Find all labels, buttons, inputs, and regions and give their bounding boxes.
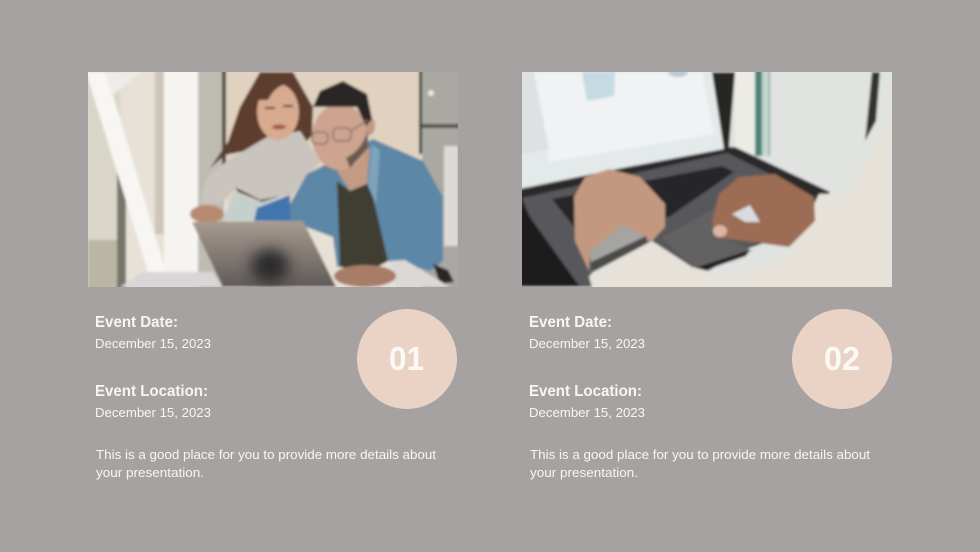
description: your presentation. [96,465,204,480]
description: This is a good place for you to provide more details about [96,447,436,462]
heading: event location: Event Location: [95,383,208,400]
description: This is a good place for you to provide more details about [530,447,870,462]
watch [588,224,645,264]
description: your presentation. [530,465,638,480]
number badge 02: 02 [824,340,860,377]
slide [88,72,892,480]
card 02 details [529,314,870,480]
location value: December 15, 2023 [529,405,645,420]
date value: December 15, 2023 [95,336,211,351]
description [96,447,436,480]
card 01 details [95,314,436,480]
number badge 01 [357,309,457,409]
number badge 01: 01 [389,340,424,377]
left hand [574,169,665,271]
description [530,447,870,480]
photo: hands typing on a laptop [522,72,892,287]
man [290,139,443,271]
photo: two colleagues at a laptop [88,72,458,287]
heading: event location: Event Location: [529,383,642,400]
number badge 02 [792,309,892,409]
location value: December 15, 2023 [95,405,211,420]
date value: December 15, 2023 [529,336,645,351]
heading: event date: Event Date: [529,314,612,331]
right hand [712,174,815,247]
heading: event date: Event Date: [95,314,178,331]
woman [210,72,313,168]
sleeve [587,192,830,287]
laptop [192,221,336,287]
